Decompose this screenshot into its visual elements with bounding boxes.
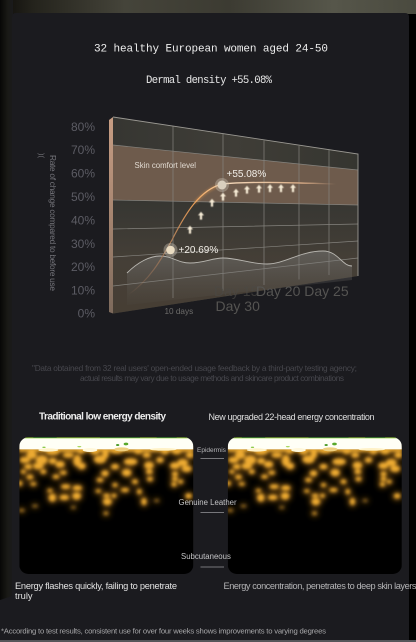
footnote: data source: "Data obtained from 32 real users' open-ended usage feedback by a third-party testing agency; <box>32 363 357 373</box>
y axis labels: 10% <box>71 284 95 298</box>
label: genuine leather: Genuine Leather <box>178 498 237 507</box>
right heading: New upgraded 22-head energy concentration <box>208 412 374 422</box>
right scan image <box>227 437 402 574</box>
chart wall <box>113 117 358 314</box>
left edge strip <box>0 0 13 642</box>
left caption: truly <box>15 591 33 601</box>
y axis title: Rate of change compared to before use <box>48 155 58 291</box>
left scan image <box>18 437 193 574</box>
right caption: Energy concentration, penetrates to deep skin layers <box>224 581 416 591</box>
label: subcutaneous: Subcutaneous <box>181 552 231 561</box>
bottom edge line <box>0 640 416 642</box>
wave area <box>127 251 352 305</box>
subtitle: dermal density: Dermal density +55.08% <box>146 75 273 87</box>
y axis small glyph: )( <box>37 153 46 158</box>
skin layer labels <box>178 447 237 567</box>
footnote: data source: actual results may vary due to usage methods and skincare product combinations <box>80 373 344 383</box>
y axis labels: 20% <box>71 260 95 274</box>
x axis labels: Day 30 <box>216 298 260 314</box>
x axis labels <box>164 283 349 316</box>
value +20.69%: +20.69% <box>178 245 218 256</box>
y axis labels: 80% <box>71 120 95 134</box>
chart <box>109 117 358 314</box>
comfort band <box>113 145 358 205</box>
top photo strip <box>0 0 416 14</box>
x axis labels: 10 days <box>164 307 193 316</box>
bottom footnote: *According to test results, consistent use for over four weeks shows improvements to varying degrees <box>1 626 326 636</box>
y axis labels: 70% <box>71 143 95 157</box>
y axis labels: 60% <box>71 166 95 180</box>
title: 32 healthy European women aged 24-50 <box>94 44 328 56</box>
y axis labels: 0% <box>78 306 95 320</box>
left heading: Traditional low energy density <box>39 412 166 422</box>
y axis labels: 40% <box>71 214 95 228</box>
marker: day 20 point <box>215 178 229 192</box>
x axis labels: Day 15 <box>214 283 259 299</box>
x axis labels: Day 20 Day 25 <box>256 283 349 299</box>
grid lines <box>113 117 358 298</box>
y axis labels <box>71 120 95 320</box>
growth curve <box>128 184 222 295</box>
left caption <box>15 581 177 601</box>
footnote: data source <box>32 363 357 383</box>
y axis labels: 30% <box>71 237 95 251</box>
value +55.08%: +55.08% <box>226 169 266 180</box>
y axis labels: 50% <box>71 190 95 204</box>
chart side bar <box>109 117 113 314</box>
label: epidermis: Epidermis <box>197 447 227 454</box>
left caption: Energy flashes quickly, failing to penetrate <box>15 581 177 591</box>
upward arrows <box>187 184 296 234</box>
band label: Skin comfort level <box>134 161 196 170</box>
marker: day 10 point <box>164 243 178 257</box>
